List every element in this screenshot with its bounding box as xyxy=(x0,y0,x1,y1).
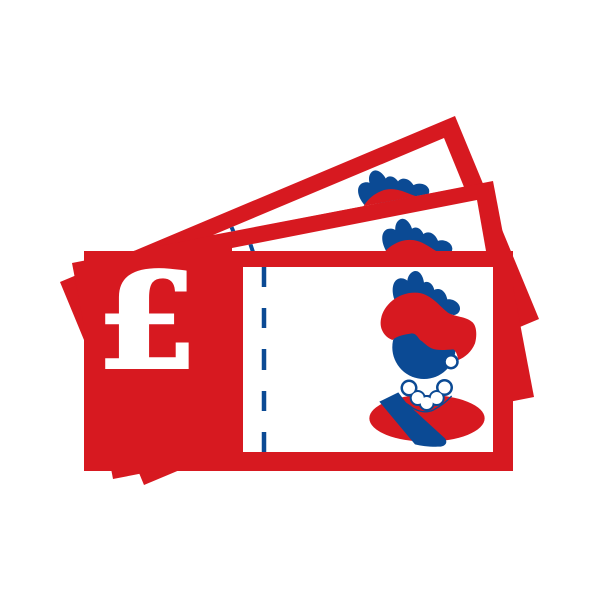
front banknote xyxy=(84,244,513,471)
dashed security line xyxy=(262,267,266,452)
middle banknote xyxy=(72,181,534,479)
back note portrait crown xyxy=(230,170,430,232)
face xyxy=(392,316,456,379)
middle note portrait crown xyxy=(248,218,452,251)
shoulders and sash xyxy=(369,392,485,447)
crown and hair xyxy=(381,271,476,360)
illustration: fan of pound banknotes xyxy=(60,116,539,485)
earring xyxy=(444,355,458,368)
back banknote xyxy=(60,116,539,485)
queen portrait xyxy=(369,271,485,447)
pearl necklace xyxy=(400,379,453,411)
pound sign: £ xyxy=(96,244,198,399)
